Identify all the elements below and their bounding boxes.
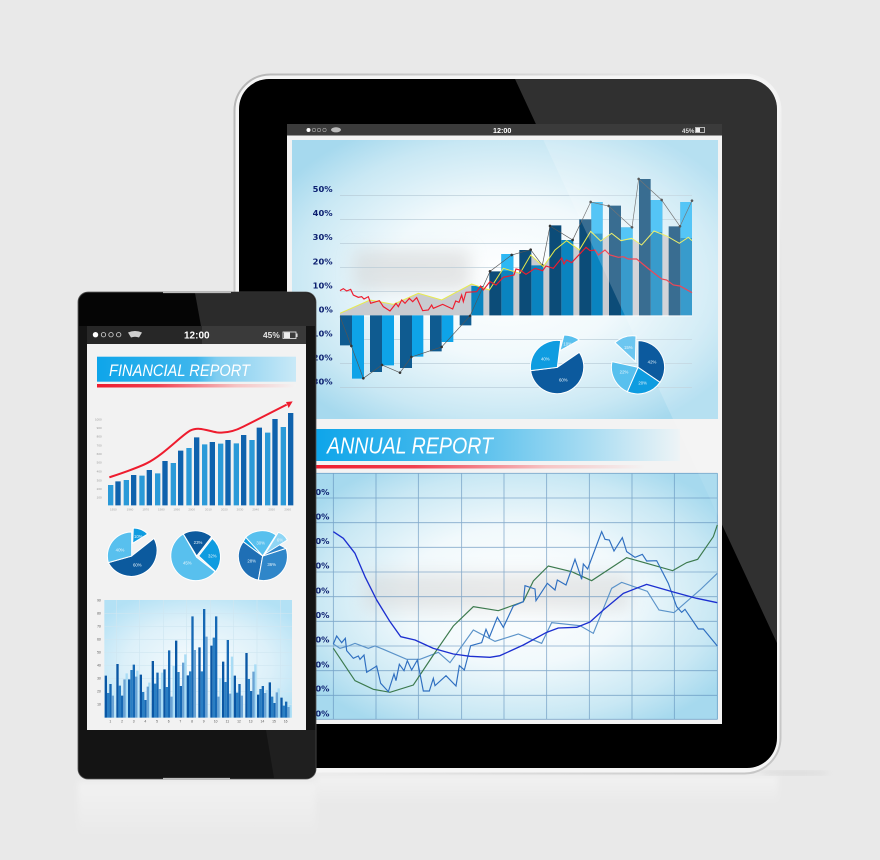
y axis labels: [95, 417, 102, 500]
lighter bars: [113, 637, 288, 718]
x axis labels: [109, 719, 288, 723]
axis labels: 0%: [315, 561, 330, 571]
pie chart: 60/40/10: 60%: [133, 563, 142, 568]
tablet bezel glare: [515, 79, 777, 643]
x axis labels: 15: [272, 719, 276, 723]
negative bars: [340, 315, 471, 379]
phone bar chart: [97, 598, 292, 723]
pie chart: 42/20/22/15: 20%: [638, 380, 647, 385]
positive light bars: [471, 200, 692, 315]
lower screen glare: [698, 473, 718, 514]
dark blue smooth line: [333, 532, 717, 657]
red trend arrow: [109, 401, 293, 477]
pie chart: 28/36/30/6: 6%: [277, 537, 283, 542]
y axis labels: 50: [97, 651, 101, 655]
x axis labels: 2030: [237, 507, 244, 511]
x axis labels: 2050: [268, 507, 275, 511]
phone body: [78, 292, 316, 779]
axis labels: 0%: [315, 487, 330, 497]
percent labels: [313, 184, 333, 386]
axis labels: 0%: [315, 512, 330, 522]
floor reflection: [78, 770, 829, 837]
phone: [78, 292, 316, 779]
tablet status bar: 12:00: [493, 126, 511, 135]
pie chart: 23/32/45: [171, 531, 221, 581]
banner title: FINANCIAL REPORT: [109, 362, 251, 380]
percent labels: 20%: [313, 256, 333, 266]
pie chart: 60/40/10: 60%: [559, 377, 568, 382]
gray area under yellow line: [340, 231, 692, 315]
axis labels: 0%: [315, 634, 330, 644]
percent labels: 10%: [313, 328, 333, 338]
x axis labels: 9: [203, 719, 205, 723]
x axis labels: 14: [260, 719, 264, 723]
grid: [315, 473, 717, 719]
steel blue line: [333, 573, 717, 663]
axis labels: 0%: [315, 708, 330, 718]
pie chart: 60/40/10: 10%: [134, 534, 143, 539]
x axis labels: 1950: [110, 507, 117, 511]
banner red rule: [315, 465, 645, 468]
percent labels: 30%: [313, 376, 333, 386]
pie chart: 60/40/10: 40%: [116, 547, 124, 552]
phone status bar: 12:00: [184, 331, 210, 342]
y axis labels: 30: [97, 677, 101, 681]
y axis labels: 600: [97, 452, 102, 456]
phone screen: [87, 344, 306, 730]
pie chart: 28/36/30/6: 36%: [267, 562, 276, 567]
percent labels: 0%: [319, 304, 333, 314]
x axis labels: 2010: [205, 507, 212, 511]
y axis labels: 60: [97, 638, 101, 642]
x axis labels: 13: [249, 719, 253, 723]
y axis labels: 800: [97, 435, 102, 439]
light bars: [108, 427, 286, 505]
tablet bezel: [239, 79, 777, 768]
x axis labels: 1990: [173, 507, 180, 511]
x axis labels: 4: [144, 719, 146, 723]
y axis labels: 300: [97, 478, 102, 482]
tablet status bar: 45%: [682, 128, 695, 135]
annual report banner: [315, 429, 680, 468]
x axis labels: 1: [109, 719, 111, 723]
y axis labels: 20: [97, 690, 101, 694]
grid lines: [340, 195, 692, 387]
pie chart: 28/36/30/6: 30%: [256, 541, 265, 546]
pie chart: 42/20/22/15: 15%: [624, 345, 633, 350]
tablet pie charts: [530, 335, 665, 394]
pie chart: 28/36/30/6: [238, 531, 287, 581]
x axis labels: 10: [214, 719, 218, 723]
green line: [333, 525, 717, 692]
pie chart: 60/40/10: 40%: [541, 356, 550, 361]
y axis labels: 10: [97, 703, 101, 707]
pie chart: 23/32/45: 32%: [208, 553, 217, 558]
y axis labels: 200: [97, 487, 102, 491]
tablet: [234, 74, 780, 774]
phone edge highlights: [163, 292, 231, 778]
x axis labels: 5: [156, 719, 158, 723]
banner red rule: [97, 384, 296, 388]
phone bottom glare: [266, 730, 315, 778]
axis labels: [315, 487, 330, 718]
gray haze: [363, 573, 630, 610]
pie chart: 28/36/30/6: 28%: [247, 559, 256, 564]
tablet screen: [287, 136, 722, 724]
y axis labels: 40: [97, 664, 101, 668]
axis labels: 0%: [315, 536, 330, 546]
x axis labels: 2020: [221, 507, 228, 511]
x axis labels: 2: [121, 719, 123, 723]
x axis labels: 6: [168, 719, 170, 723]
pie chart: 23/32/45: 45%: [183, 560, 192, 565]
x axis labels: 3: [133, 719, 135, 723]
pie chart: 60/40/10: [107, 528, 157, 576]
y axis labels: 90: [97, 598, 101, 602]
jagged blue line: [333, 532, 717, 692]
yellow line: [340, 231, 692, 313]
phone top black bezel: [79, 293, 202, 326]
gray connector line: [340, 178, 693, 380]
pie chart: 60/40/10: [530, 335, 584, 394]
phone status bar: 45%: [263, 330, 280, 340]
gray haze: [353, 250, 470, 290]
bright bar tops: [501, 200, 692, 271]
tall bars: [110, 609, 286, 718]
pie chart: 42/20/22/15: 42%: [648, 359, 656, 364]
y axis labels: [97, 598, 101, 707]
x axis labels: 8: [191, 719, 193, 723]
x axis labels: 2040: [252, 507, 259, 511]
percent labels: 10%: [313, 280, 333, 290]
x axis labels: 1960: [127, 507, 134, 511]
pale bars: [127, 654, 290, 718]
x axis labels: 1980: [158, 507, 165, 511]
phone status bar: [87, 326, 306, 344]
x axis labels: 7: [179, 719, 181, 723]
x axis labels: 2060: [284, 507, 291, 511]
darkest bars: [106, 641, 281, 718]
percent labels: 20%: [313, 352, 333, 362]
x axis labels: 2000: [188, 507, 195, 511]
bar chart with trend arrow: [95, 401, 293, 511]
x axis labels: 16: [284, 719, 288, 723]
percent labels: 50%: [313, 184, 333, 194]
tablet rim: [234, 74, 780, 774]
tablet status bar: [287, 124, 722, 136]
axis labels: 0%: [315, 610, 330, 620]
y axis labels: 80: [97, 612, 101, 616]
y axis labels: 70: [97, 625, 101, 629]
x axis labels: 1970: [142, 507, 149, 511]
x axis labels: 12: [237, 719, 241, 723]
pie chart: 23/32/45: 23%: [194, 540, 202, 545]
panel: stacked bar and line chart: [292, 140, 718, 419]
y axis labels: 700: [97, 443, 102, 447]
pie charts row: [107, 528, 287, 581]
zero axis: [340, 314, 692, 318]
dark bars: [489, 179, 680, 315]
y axis labels: 500: [97, 461, 102, 465]
axis labels: 0%: [315, 684, 330, 694]
percent labels: 30%: [313, 232, 333, 242]
pie chart: 42/20/22/15: [611, 336, 665, 394]
financial report banner: [97, 357, 296, 388]
red line: [340, 247, 692, 311]
mid bars: [108, 638, 284, 718]
dark bars: [115, 413, 293, 505]
y axis labels: 400: [97, 470, 102, 474]
phone top glare: [195, 293, 315, 326]
banner title: ANNUAL REPORT: [325, 432, 495, 458]
x axis labels: 11: [226, 719, 229, 723]
grid: [104, 600, 292, 718]
y axis labels: 900: [97, 426, 102, 430]
axis labels: 0%: [315, 659, 330, 669]
y axis labels: 1000: [95, 417, 102, 421]
axis labels: 0%: [315, 585, 330, 595]
y axis labels: 100: [97, 496, 102, 500]
x axis labels: [110, 507, 291, 511]
upper screen glare: [544, 140, 718, 419]
pie chart: 42/20/22/15: 22%: [620, 370, 628, 375]
panel: annual line chart: [315, 473, 718, 720]
pie chart: 60/40/10: 10%: [563, 342, 572, 347]
percent labels: 40%: [313, 208, 333, 218]
